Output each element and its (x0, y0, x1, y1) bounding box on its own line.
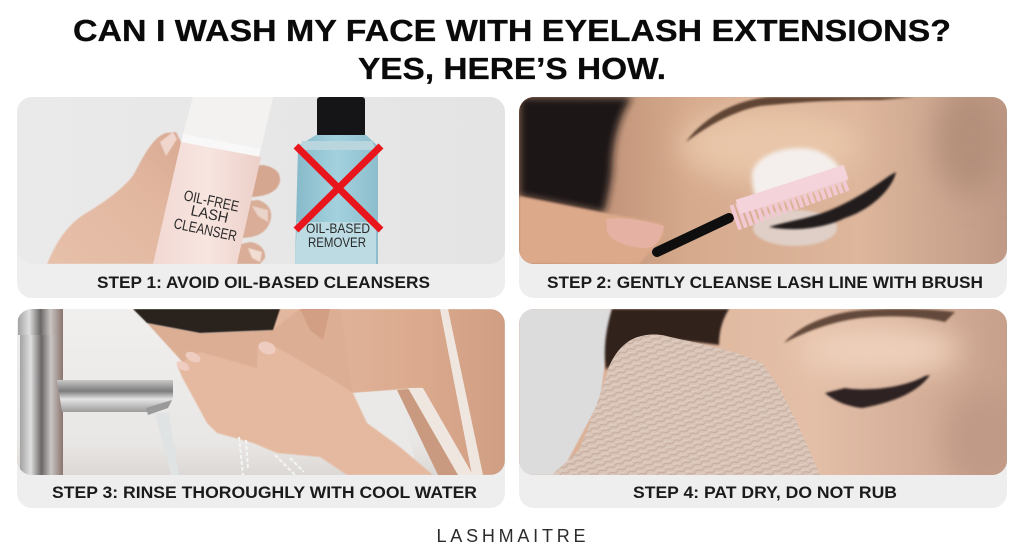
caption: step 1: STEP 1: AVOID OIL-BASED CLEANSERS (97, 273, 430, 292)
lower foam (753, 210, 837, 246)
title (73, 13, 951, 86)
brand footer: LASHMAITRE (436, 526, 586, 546)
icon: oil-free cleanser bottle: LASH (189, 202, 230, 227)
eyebrow (686, 97, 915, 142)
caption: step 4: STEP 4: PAT DRY, DO NOT RUB (633, 483, 897, 502)
title: YES, HERE’S HOW. (358, 51, 666, 86)
panel: step 2 cleanse lash line with brush (519, 85, 1007, 298)
upper arm (397, 389, 458, 475)
water drips (239, 437, 304, 475)
hair (605, 309, 729, 370)
hands (177, 342, 433, 475)
background gap under the neck (353, 390, 415, 460)
icon: red cross (296, 146, 381, 230)
ear (300, 309, 330, 340)
hair (519, 97, 632, 213)
panel: step 3 rinse with cool water (17, 309, 505, 508)
icon: oil-free cleanser bottle: CLEANSER (172, 215, 238, 245)
water stream (155, 413, 179, 475)
icon: hand holding bottle (47, 132, 280, 264)
finger (519, 196, 665, 264)
icon: faucet (18, 309, 173, 475)
neck and shoulders (270, 309, 505, 475)
wall background (519, 309, 612, 475)
caption: step 2: STEP 2: GENTLY CLEANSE LASH LINE WITH BRUSH (547, 273, 983, 292)
eyelashes (769, 172, 896, 229)
strap (440, 309, 483, 475)
icon: oil-free cleanser bottle: OIL-FREE (182, 187, 240, 216)
caption: step 3: STEP 3: RINSE THOROUGHLY WITH COOL WATER (52, 483, 477, 502)
foam on eyelid (752, 148, 846, 208)
eyelashes (825, 375, 930, 408)
eyebrow (784, 309, 955, 343)
face (147, 309, 353, 400)
title: CAN I WASH MY FACE WITH EYELASH EXTENSIONS? (73, 13, 951, 48)
icon: oil-based remover bottle (295, 97, 378, 264)
towel (552, 334, 820, 475)
icon: oil-based remover bottle: OIL-BASED (306, 220, 370, 236)
icon: oil-based remover bottle: REMOVER (308, 234, 366, 250)
fingernail (606, 218, 664, 248)
mascara brush (657, 172, 846, 252)
panel: step 4 pat dry do not rub (519, 309, 1024, 508)
hair (133, 309, 280, 333)
icon: oil-free cleanser bottle (153, 97, 273, 264)
panel: step 1 avoid oil-based cleansers (17, 97, 505, 298)
